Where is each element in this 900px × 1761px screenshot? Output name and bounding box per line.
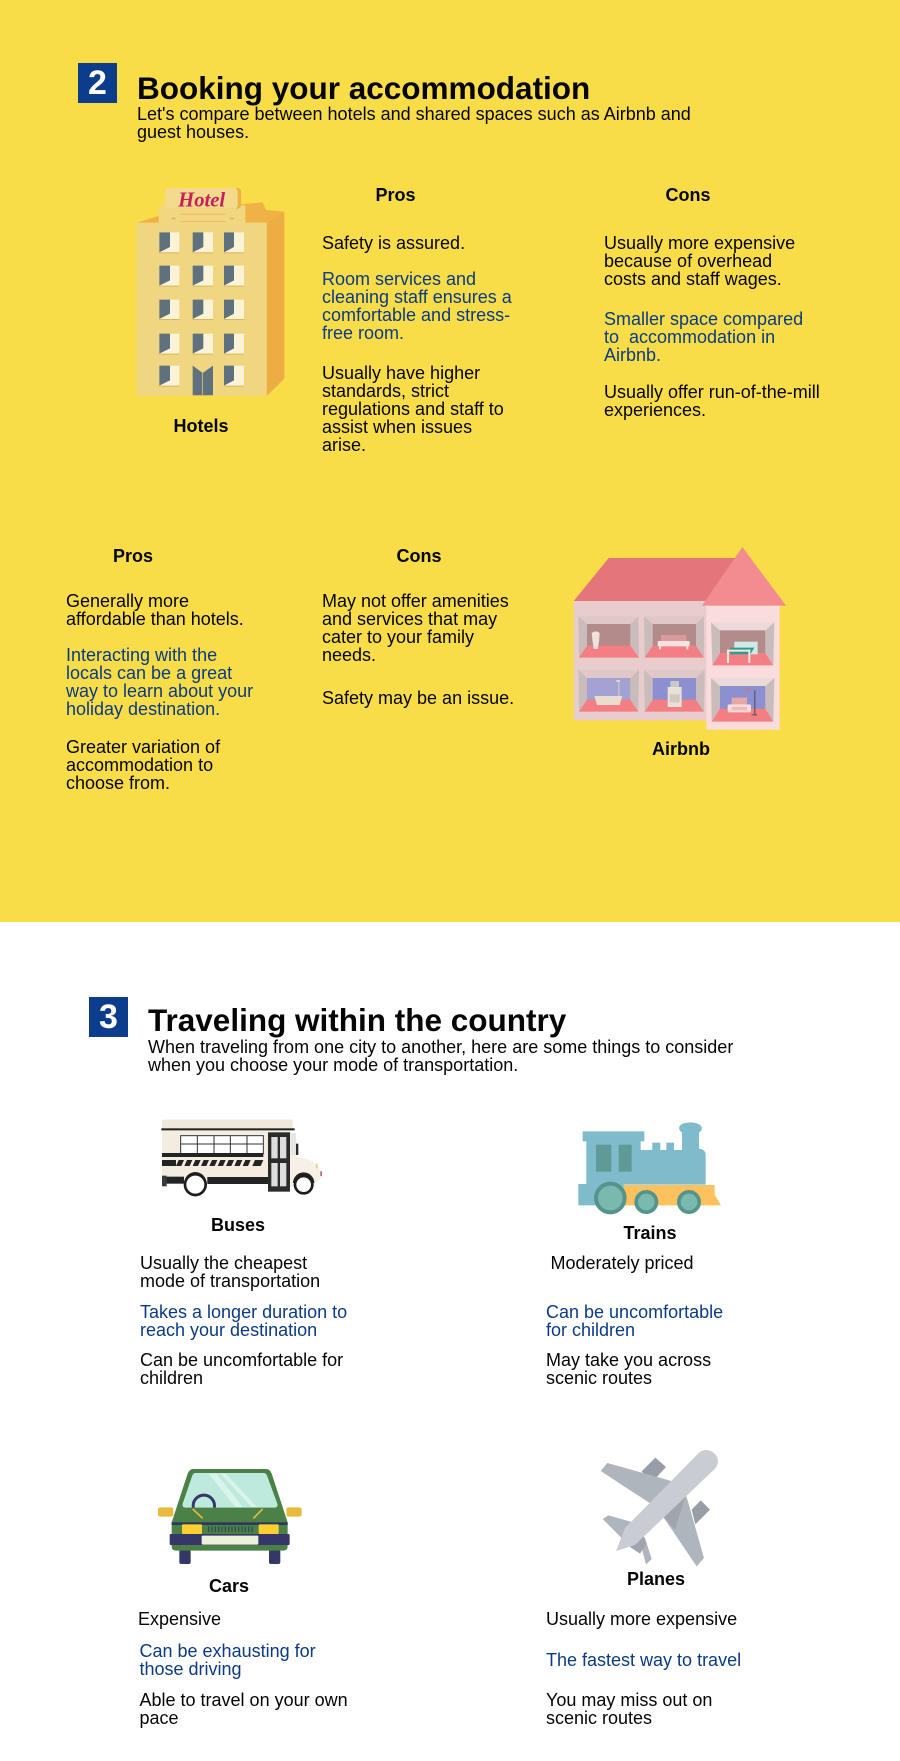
label: cars: Cars: [209, 1576, 249, 1596]
section number 2: [78, 63, 117, 103]
heading: pros: Pros: [113, 546, 153, 566]
text: greater variation: Greater variation of: [66, 737, 220, 757]
text: may not offer amenities: May not offer amenities: [322, 591, 509, 611]
intro text: choosing mode of transportation: [148, 1037, 734, 1075]
icon: hotel building: Hotel: [177, 189, 225, 211]
text: exhausting for drivers: Can be exhausting for: [140, 1641, 316, 1661]
icon: train: [578, 1122, 721, 1214]
intro text: compare hotels and shared spaces: Let's compare between hotels and shared spaces such as Airbnb and: [137, 104, 691, 124]
text: may not offer amenities: needs.: [322, 645, 376, 665]
text: cheapest: Usually the cheapest: [140, 1253, 307, 1273]
heading: cons: Cons: [396, 546, 442, 566]
text: safety may be an issue: Safety may be an issue.: [322, 688, 514, 708]
icon: plane: [600, 1450, 718, 1566]
label: trains: Trains: [623, 1223, 677, 1243]
text: interacting with locals: Interacting with the: [66, 645, 217, 665]
text: moderately priced: Moderately priced: [550, 1253, 694, 1273]
text: scenic routes: May take you across: [546, 1350, 711, 1370]
text: more expensive: Usually more expensive: [546, 1609, 737, 1629]
text: smaller space: to accommodation in: [604, 327, 775, 347]
text: exhausting for drivers: [140, 1641, 316, 1679]
text: exhausting for drivers: those driving: [140, 1659, 242, 1679]
rooms: [578, 616, 774, 721]
text: room services: Room services and: [322, 269, 476, 289]
text: uncomfortable for children: [140, 1350, 343, 1388]
label: hotels: Hotels: [173, 416, 229, 436]
trains details: [546, 1253, 723, 1388]
panel: booking your accommodation: [0, 0, 900, 922]
section number 3: [89, 997, 128, 1037]
text: room services: cleaning staff ensures a: [322, 287, 512, 307]
text: room services: comfortable and stress-: [322, 305, 510, 325]
text: may not offer amenities: cater to your family: [322, 627, 474, 647]
text: higher standards: Usually have higher: [322, 363, 480, 383]
text: higher standards: [322, 363, 504, 455]
hotel pros column: [322, 185, 512, 455]
planes details: [546, 1609, 741, 1728]
section number 3: 3: [99, 998, 118, 1036]
text: fastest way to travel: The fastest way to travel: [546, 1650, 741, 1670]
text: longer duration: Takes a longer duration to: [140, 1302, 347, 1322]
text: run-of-the-mill: experiences.: [604, 400, 706, 420]
text: uncomfortable for children: Can be uncomfortable: [546, 1302, 723, 1322]
text: interacting with locals: locals can be a great: [66, 663, 232, 683]
text: scenic routes: [546, 1350, 711, 1388]
text: interacting with locals: way to learn about your: [66, 681, 253, 701]
label: airbnb: Airbnb: [652, 739, 710, 759]
text: may miss scenic routes: [546, 1690, 712, 1728]
buses details: [140, 1253, 347, 1388]
text: higher standards: regulations and staff to: [322, 399, 504, 419]
text: uncomfortable for children: Can be uncomfortable for: [140, 1350, 343, 1370]
text: may not offer amenities: and services that may: [322, 609, 497, 629]
text: more expensive: because of overhead: [604, 251, 772, 271]
sofa: [657, 635, 689, 649]
heading: booking your accommodation: Booking your accommodation: [137, 70, 590, 106]
text: greater variation: [66, 737, 220, 793]
text: scenic routes: scenic routes: [546, 1368, 652, 1388]
cars details: [138, 1609, 348, 1728]
text: more affordable: Generally more: [66, 591, 189, 611]
panel: traveling within the country: [89, 997, 734, 1075]
bathtub: [594, 680, 622, 705]
intro text: compare hotels and shared spaces: [137, 104, 691, 142]
text: more expensive: Usually more expensive: [604, 233, 795, 253]
text: more expensive: [604, 233, 795, 289]
toilet: [591, 631, 599, 649]
text: run-of-the-mill: Usually offer run-of-the-mill: [604, 382, 820, 402]
text: higher standards: arise.: [322, 435, 366, 455]
heading: pros: Pros: [375, 185, 416, 205]
section number 2: 2: [88, 64, 107, 102]
icon: car: [158, 1469, 302, 1564]
text: own pace: pace: [140, 1708, 179, 1728]
text: higher standards: standards, strict: [322, 381, 449, 401]
intro text: choosing mode of transportation: when you choose your mode of transportation.: [148, 1055, 518, 1075]
windows: [159, 232, 244, 386]
text: greater variation: accommodation to: [66, 755, 213, 775]
label: planes: Planes: [627, 1569, 685, 1589]
intro text: compare hotels and shared spaces: guest houses.: [137, 122, 249, 142]
text: own pace: Able to travel on your own: [140, 1690, 348, 1710]
lamp: [745, 688, 757, 715]
text: interacting with locals: holiday destination.: [66, 699, 220, 719]
text: longer duration: reach your destination: [140, 1320, 317, 1340]
armchair: [727, 697, 751, 712]
airbnb cons column: [322, 546, 514, 708]
heading: traveling within the country: Traveling within the country: [148, 1002, 566, 1038]
text: may not offer amenities: [322, 591, 509, 665]
icon: hotel building: [136, 188, 284, 396]
text: may miss scenic routes: scenic routes: [546, 1708, 652, 1728]
text: greater variation: choose from.: [66, 773, 170, 793]
text: more expensive: costs and staff wages.: [604, 269, 782, 289]
text: own pace: [140, 1690, 348, 1728]
text: cheapest: [140, 1253, 320, 1291]
text: uncomfortable for children: [546, 1302, 723, 1340]
text: uncomfortable for children: for children: [546, 1320, 635, 1340]
intro text: choosing mode of transportation: When traveling from one city to another, here are some things to consider: [148, 1037, 733, 1057]
bed: [727, 641, 757, 663]
label: buses: Buses: [211, 1215, 265, 1235]
text: smaller space: Airbnb.: [604, 345, 661, 365]
text: more affordable: affordable than hotels.: [66, 609, 244, 629]
text: safety is assured: Safety is assured.: [322, 233, 465, 253]
heading: cons: Cons: [666, 185, 710, 205]
stove: [667, 681, 681, 707]
text: may miss scenic routes: You may miss out on: [546, 1690, 712, 1710]
text: room services: free room.: [322, 323, 404, 343]
text: higher standards: assist when issues: [322, 417, 472, 437]
text: smaller space: [604, 309, 803, 365]
text: more affordable: [66, 591, 244, 629]
airbnb pros column: [66, 546, 253, 793]
text: run-of-the-mill: [604, 382, 820, 420]
icon: airbnb house: [574, 547, 786, 730]
text: room services: [322, 269, 512, 343]
text: cheapest: mode of transportation: [140, 1271, 320, 1291]
hotel cons column: [604, 185, 820, 420]
icon: bus: [161, 1120, 322, 1196]
text: smaller space: Smaller space compared: [604, 309, 803, 329]
text: uncomfortable for children: children: [140, 1368, 203, 1388]
text: interacting with locals: [66, 645, 253, 719]
text: longer duration: [140, 1302, 347, 1340]
text: expensive: Expensive: [138, 1609, 221, 1629]
